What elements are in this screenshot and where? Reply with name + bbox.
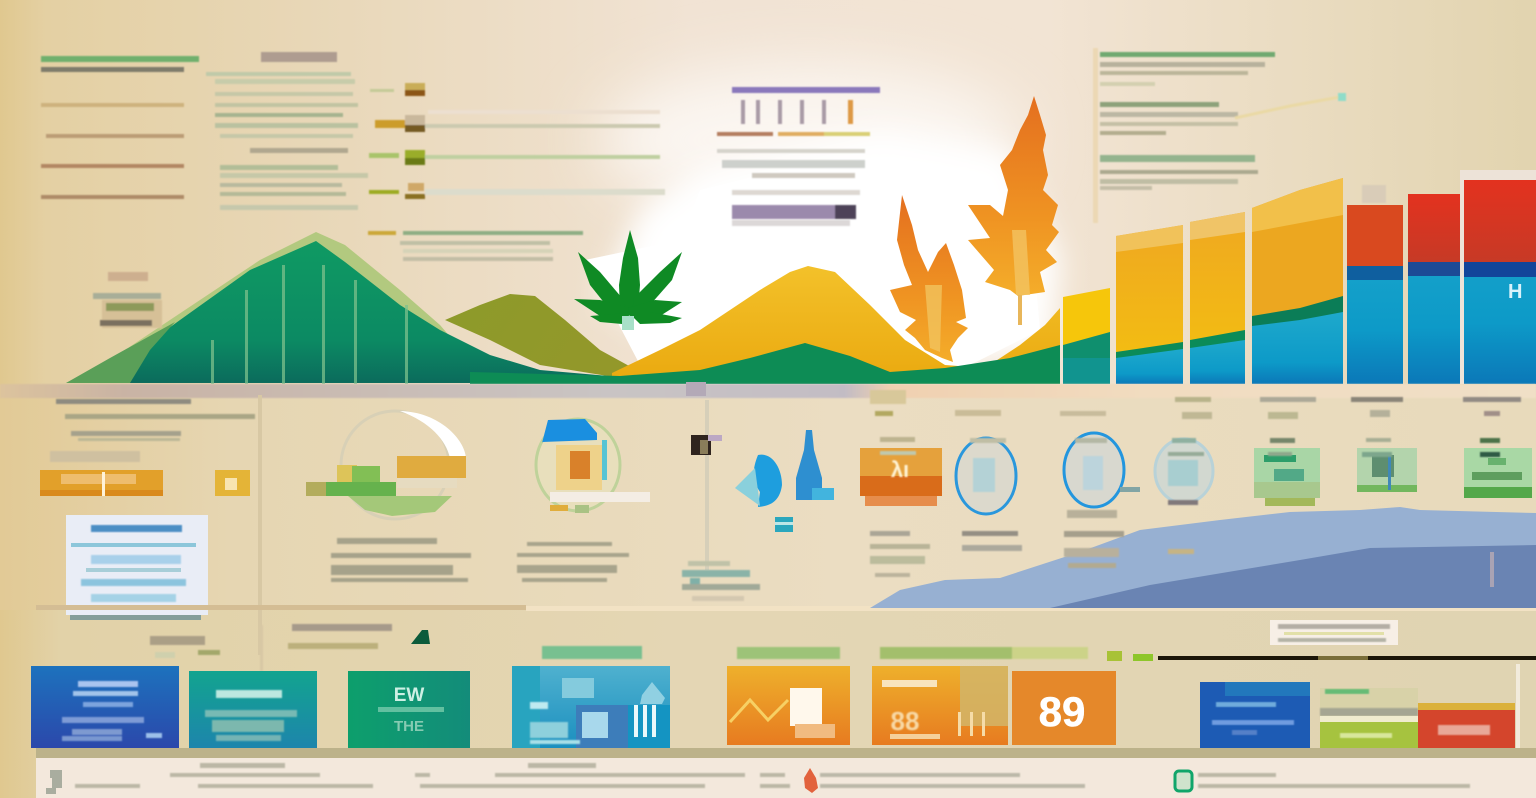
bar 7: H xyxy=(1508,281,1522,303)
footer icon: grey figure xyxy=(46,770,62,794)
left vertical divider xyxy=(258,395,262,655)
labels above the icon row xyxy=(870,390,1521,457)
card: orange chart: 88 xyxy=(891,706,919,736)
card: orange chart xyxy=(872,666,1008,745)
icon: blue hand and bottle xyxy=(735,430,834,532)
text block: upper list xyxy=(206,52,368,210)
left mid text xyxy=(50,399,255,462)
bar 1 xyxy=(1063,288,1110,384)
small orange tag xyxy=(215,470,250,496)
base band xyxy=(36,748,1536,758)
blue area chart xyxy=(870,507,1536,608)
card: blue xyxy=(31,666,179,748)
card: orange number: 89 xyxy=(1039,688,1085,735)
olive hill xyxy=(445,294,640,378)
orange label bar xyxy=(40,470,163,496)
heading: cyan card xyxy=(542,646,642,659)
top-left legend heading xyxy=(41,56,199,72)
top-left legend lines xyxy=(41,103,184,199)
centre title block xyxy=(717,87,880,226)
label: lower-left small xyxy=(150,636,220,658)
area chart: mountains xyxy=(66,232,1060,384)
bar 5 xyxy=(1347,205,1403,384)
footer text: left xyxy=(75,763,790,788)
text block: basket caption xyxy=(331,538,471,582)
card: green: EW xyxy=(394,685,424,706)
green icon tile 2 xyxy=(1357,448,1417,492)
footer icon: green badge xyxy=(1175,771,1192,791)
main green peak xyxy=(80,241,640,383)
card: green: THE xyxy=(394,718,424,735)
card: orange number xyxy=(1012,671,1116,745)
card: green xyxy=(348,671,470,748)
green icon tile 3 xyxy=(1464,448,1532,498)
text block: below markers xyxy=(400,231,583,261)
pale outlined badge xyxy=(1155,439,1213,503)
orange icon tile: λı xyxy=(891,457,909,482)
gold hill xyxy=(612,266,1060,383)
right text panel xyxy=(1093,48,1386,223)
card: dark blue xyxy=(1200,682,1310,748)
lower divider line xyxy=(36,605,1536,611)
note card xyxy=(66,515,208,620)
footer strip xyxy=(36,758,1536,798)
bar 4 xyxy=(1252,178,1343,384)
card: teal xyxy=(189,671,317,748)
heading: orange cards xyxy=(737,647,1088,659)
bar 7 xyxy=(1460,170,1536,384)
blue outlined badge 1 xyxy=(956,438,1016,514)
bar chart xyxy=(1063,170,1536,384)
card: red panel xyxy=(1418,703,1515,748)
icon: green cannabis leaf xyxy=(574,230,682,330)
light green ridge xyxy=(66,232,470,383)
text block: pin caption xyxy=(682,561,760,601)
pin with vertical stem xyxy=(686,382,722,570)
bar 6 xyxy=(1408,194,1460,384)
captions below the icon row xyxy=(870,500,1198,577)
icon: large orange leaf xyxy=(968,96,1059,325)
blue outlined badge 2 xyxy=(1064,433,1140,507)
green foreground xyxy=(470,343,1060,384)
card: orange sun xyxy=(727,666,850,745)
right edge rule xyxy=(1516,664,1520,748)
peak stripes xyxy=(211,265,408,384)
horizontal divider band xyxy=(0,384,1536,398)
icon: small dark green triangle xyxy=(411,630,430,644)
green icon tile 1 xyxy=(1254,448,1320,506)
orange icon tile xyxy=(860,448,942,506)
footer icon: red marker xyxy=(804,768,818,793)
footer text: centre xyxy=(820,773,1085,788)
icon: basket with crops xyxy=(306,411,466,519)
text block: seed caption xyxy=(517,542,629,582)
white note xyxy=(1270,620,1398,645)
icon: small orange wheat leaf xyxy=(890,195,968,362)
white glow behind the chart xyxy=(600,130,1060,370)
bar 2 xyxy=(1116,225,1183,384)
soft pale haze above the chart xyxy=(600,65,1020,215)
bar 3 xyxy=(1190,212,1245,384)
timeline markers and connector lines xyxy=(368,83,665,235)
green legend blocks and black rule xyxy=(1107,651,1536,661)
card: cyan with buildings xyxy=(512,666,670,748)
footer text: right xyxy=(1198,773,1470,788)
small label near peak xyxy=(93,272,162,328)
card: lime panel xyxy=(1320,688,1418,748)
icon: seed badge xyxy=(536,419,650,513)
label: lower-left centre xyxy=(260,624,392,671)
